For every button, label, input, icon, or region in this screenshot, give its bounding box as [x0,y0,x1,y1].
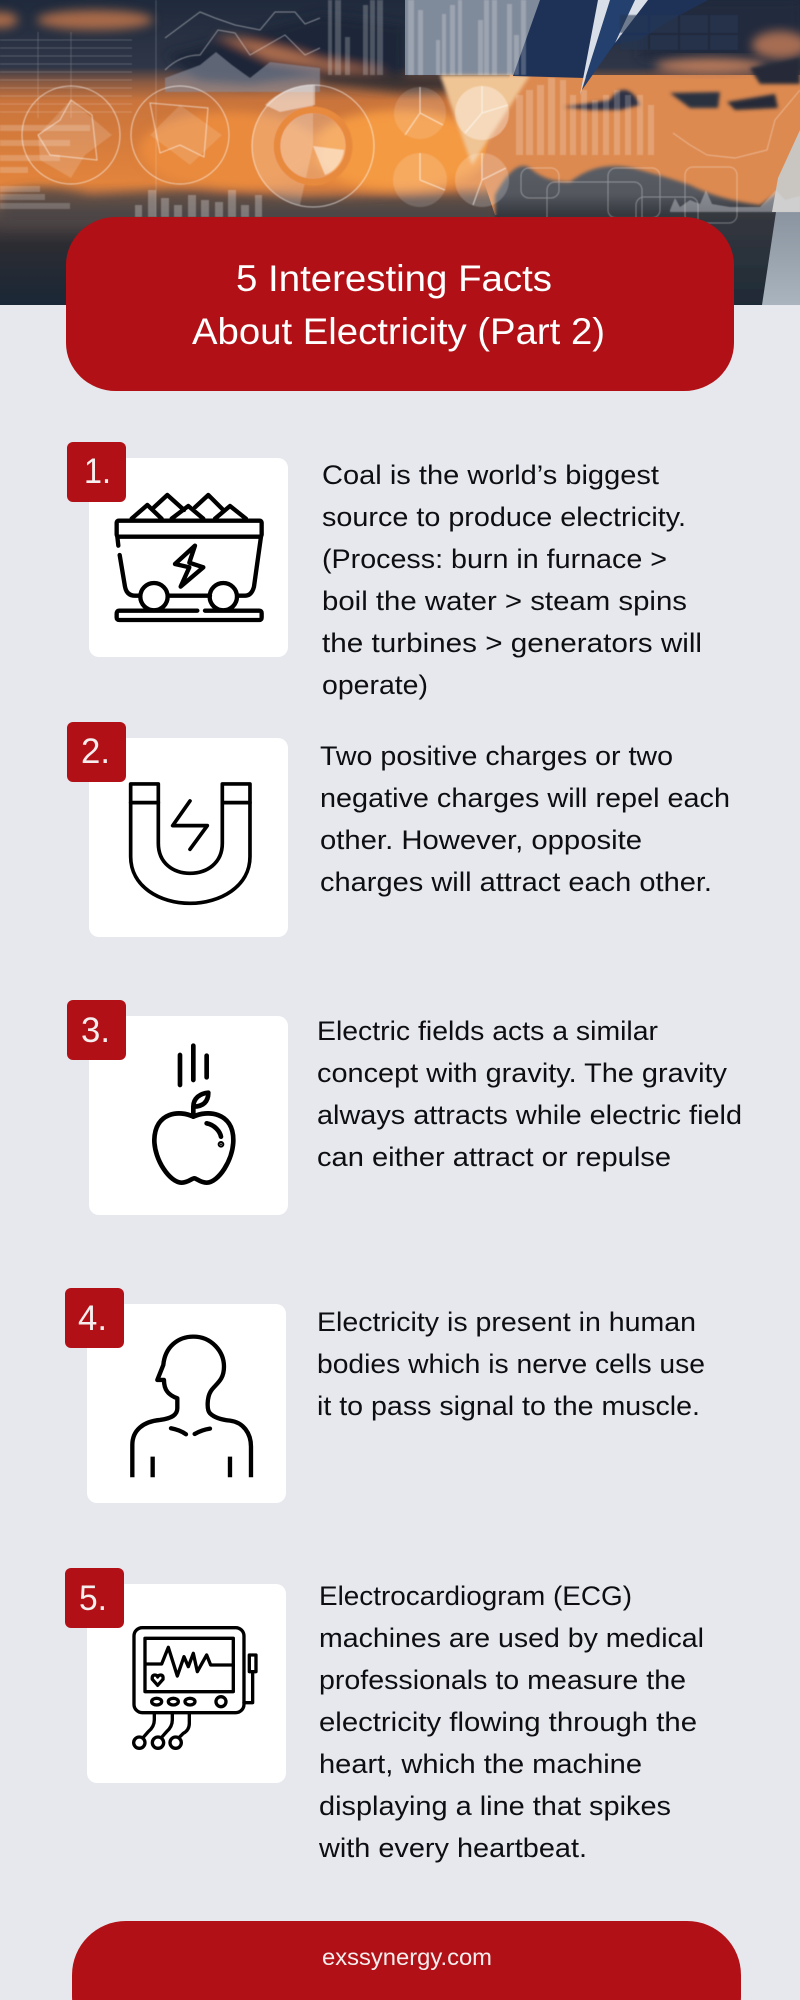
text: fact 4 [317,1307,705,1421]
panel: fact 5 ECG [65,1568,704,1863]
text: fact 4: it to pass signal to the muscle. [317,1391,700,1421]
text: fact 3 [317,1016,742,1172]
text: fact 1: boil the water > steam spins [322,586,687,616]
text: fact 5: professionals to measure the [319,1665,686,1695]
footer banner [72,1921,741,2000]
title text: About Electricity (Part 2) [192,311,605,352]
bottom small bars [135,190,262,217]
text: fact 3: always attracts while electric field [317,1100,742,1130]
number badge 3 [67,1000,126,1060]
text: fact 3: concept with gravity. The gravity [317,1058,728,1088]
text: fact 4: Electricity is present in human [317,1307,696,1337]
text: fact 5: Electrocardiogram (ECG) [319,1581,632,1611]
text: fact 1: source to produce electricity. [322,502,686,532]
suit and tie [513,0,708,78]
panel: fact 1 coal [67,442,702,700]
text: fact 1: (Process: burn in furnace > [322,544,667,574]
icon card 3 [89,1016,288,1215]
text: fact 2: charges will attract each other. [320,867,712,897]
number badge 5 [65,1568,124,1628]
icon card 5 [87,1584,286,1783]
text: fact 2 [320,741,730,897]
text: fact 2: other. However, opposite [320,825,642,855]
text: fact 4: bodies which is nerve cells use [317,1349,705,1379]
panel: fact 2 magnet [67,722,730,937]
icon: horseshoe magnet [131,784,250,903]
text: fact 3: Electric fields acts a similar [317,1016,658,1046]
rounded cards bottom right and waveform [521,167,737,232]
donut chart [252,85,374,207]
title text [192,258,605,352]
text: fact 2: negative charges will repel each [320,783,730,813]
panel: fact 3 apple [67,1000,742,1215]
text: fact 1: Coal is the world’s biggest [322,460,660,490]
text: fact 1: operate) [322,670,428,700]
icon: falling apple [154,1046,233,1183]
number badge 1 [67,442,126,502]
treeline and lower right [492,163,776,258]
text: fact 1 [322,460,702,700]
text: fact 5: electricity flowing through the [319,1707,697,1737]
number badge 4 [65,1288,124,1348]
text: fact 5: with every heartbeat. [318,1833,587,1863]
icon: ECG monitor [134,1628,256,1748]
number badge 2: 2. [81,732,110,771]
text: fact 5: heart, which the machine [319,1749,642,1779]
pale vertical bars right [516,78,654,155]
horizontal bars left [0,125,90,209]
gray vertical bars top [328,0,526,75]
text: fact 5: displaying a line that spikes [319,1791,671,1821]
header photo: businessman with data charts over a sunset [0,0,800,305]
title banner [66,217,734,391]
right side sunset [480,75,800,215]
number badge 3: 3. [81,1011,110,1050]
number badge 1: 1. [84,452,111,491]
footer website text: exssynergy.com [322,1944,492,1970]
panel: fact 4 human body [65,1288,705,1503]
icon card 4 [87,1304,286,1503]
radar charts [22,86,229,184]
gray chart backdrop [405,0,545,75]
number badge 2 [67,722,126,782]
text: fact 5: machines are used by medical [319,1623,704,1653]
pie charts [393,86,509,207]
icon card 1 [89,458,288,657]
icon card 2 [89,738,288,937]
number badge 4: 4. [78,1299,107,1338]
icon: coal cart with lightning [117,495,262,620]
data grid top right [620,15,738,50]
text: fact 5 [318,1581,704,1863]
text: fact 2: Two positive charges or two [320,741,673,771]
title text: 5 Interesting Facts [236,258,552,299]
text: fact 3: can either attract or repulse [317,1142,671,1172]
icon: human bust [132,1337,251,1477]
faint table and line charts [0,0,156,220]
number badge 5: 5. [79,1579,107,1618]
text: fact 1: the turbines > generators will [322,628,702,658]
